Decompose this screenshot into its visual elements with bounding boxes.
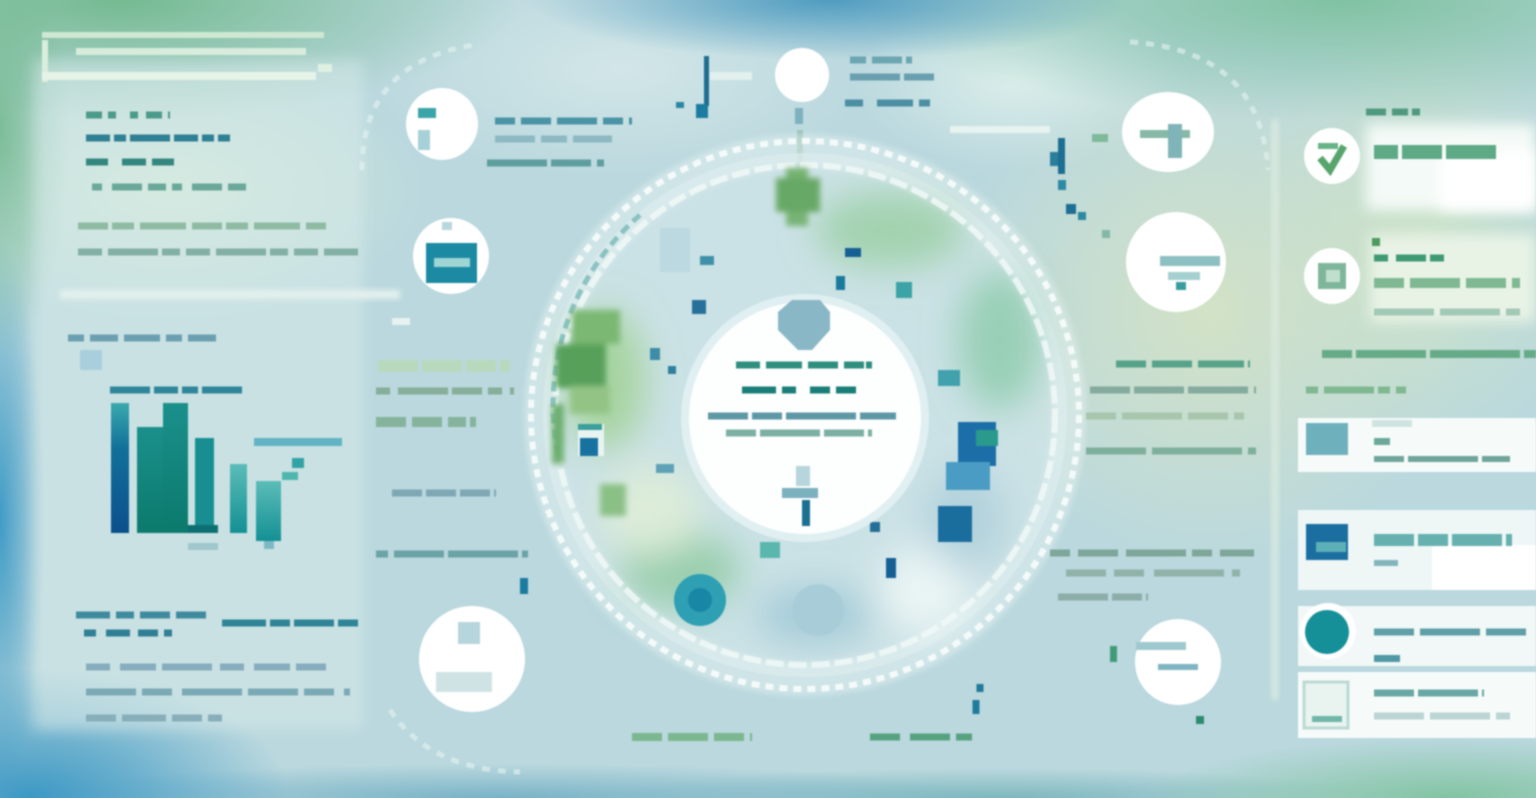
card: list item 2 (1298, 510, 1536, 590)
card: list item 4 (1298, 672, 1536, 738)
icon: chart badge (1304, 248, 1360, 304)
icon: blue blocks right (938, 422, 998, 542)
icon: top left node (406, 88, 478, 160)
icon: check badge (1304, 128, 1360, 184)
panel: left column (34, 32, 400, 730)
card: check (1304, 112, 1536, 210)
panel: right column (1272, 112, 1536, 738)
card: list item 1 (1298, 418, 1536, 472)
icon: left small node (578, 424, 604, 456)
card: chart (1304, 234, 1536, 322)
bar chart (111, 403, 342, 550)
icon: hub down arrow (782, 466, 818, 526)
icon: right top node (1122, 92, 1214, 172)
text: bottom right label (870, 734, 972, 740)
icon: blue globe bottom (792, 584, 844, 636)
bottom labels (632, 684, 980, 737)
left column icons (406, 88, 525, 712)
arrow: bottom connector (976, 684, 980, 714)
text block: right ring labels (1050, 364, 1256, 597)
text: section headings (1306, 354, 1536, 390)
header bar (42, 32, 332, 82)
text block: left ring labels (376, 318, 528, 594)
divider (60, 290, 400, 299)
right column divider (1272, 120, 1278, 700)
text: bottom left label (632, 733, 752, 741)
panel wash (34, 60, 364, 730)
icon: card node (413, 218, 489, 294)
text: hub title (708, 365, 896, 433)
right connector (950, 126, 1110, 238)
leaf: top (776, 168, 820, 226)
icon: lower left node (419, 606, 525, 712)
icon: teal globe bottom (674, 574, 726, 626)
green washes (565, 192, 1042, 643)
icon: top node and connector (676, 48, 829, 170)
icon: hub shield (778, 300, 830, 350)
ring glow (541, 151, 1069, 679)
ring strokes (531, 141, 1079, 689)
outer glow disc (543, 153, 1067, 677)
icon: right lower node (1110, 619, 1221, 724)
main ring diagram (531, 141, 1079, 689)
panel: outer arcs (362, 42, 1268, 772)
network dots (650, 228, 960, 578)
card: list item 3 (1298, 603, 1536, 666)
text block: notes (76, 615, 358, 718)
text block: chart heading (68, 338, 246, 390)
leaf: left (552, 310, 626, 516)
icon: right middle node (1126, 212, 1226, 312)
text block: top centre labels (487, 60, 938, 163)
text block: intro (78, 115, 358, 252)
centre hub (681, 294, 929, 542)
